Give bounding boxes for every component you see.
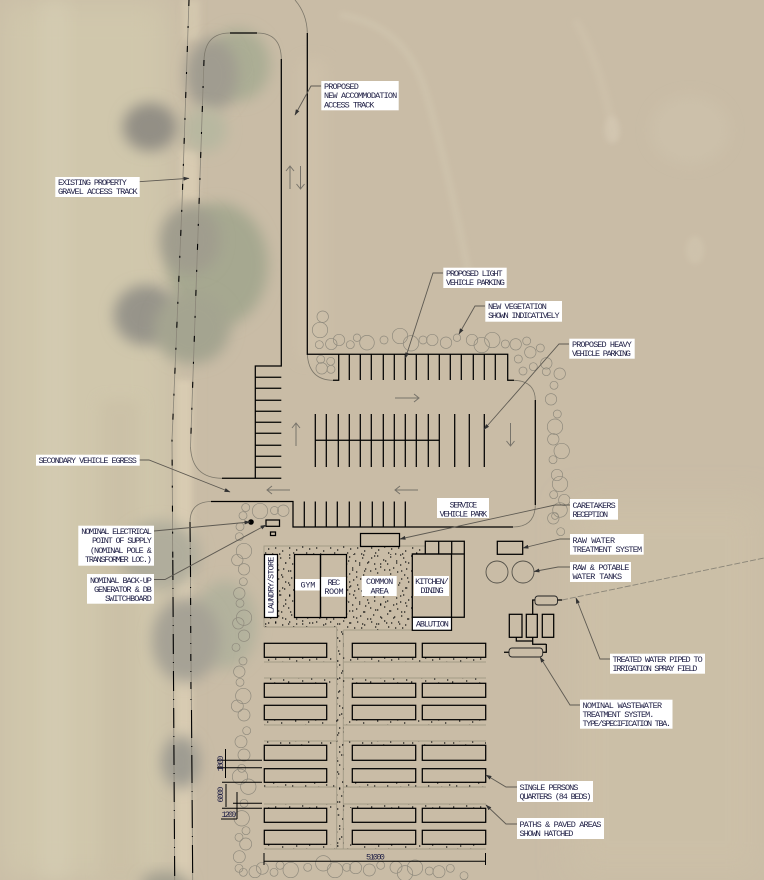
leader: raw water treatment bbox=[523, 539, 570, 548]
label: heavy vehicle parking: VEHICLE PARKING bbox=[572, 349, 631, 359]
label: caretakers reception: CARETAKERS bbox=[572, 501, 616, 511]
label: caretakers reception: RECEPTION bbox=[572, 510, 608, 520]
leader: treated water pipe bbox=[576, 598, 610, 659]
indicative new vegetation circles bbox=[231, 311, 570, 880]
label: new accommodation access track: ACCESS TRACK bbox=[324, 100, 375, 110]
label: paths and paved areas: PATHS & PAVED AREAS bbox=[520, 820, 601, 830]
label: nominal electrical point of supply: NOMINAL ELECTRICAL bbox=[81, 527, 152, 537]
gym building bbox=[294, 554, 320, 618]
label: new vegetation bbox=[485, 301, 562, 322]
leader: new vegetation bbox=[459, 306, 485, 334]
label: heavy vehicle parking bbox=[569, 339, 635, 359]
central facilities buildings bbox=[264, 534, 464, 630]
label: single persons quarters bbox=[517, 781, 593, 802]
label: single persons quarters: SINGLE PERSONS bbox=[520, 783, 578, 793]
label: single persons quarters: QUARTERS (84 BEDS) bbox=[520, 792, 590, 802]
label: treated water piped: IRRIGATION SPRAY FIELD bbox=[612, 664, 697, 674]
label: raw and potable water tanks: WATER TANKS bbox=[572, 572, 622, 582]
label: back-up generator: NOMINAL BACK-UP bbox=[90, 576, 152, 586]
label: new vegetation: SHOWN INDICATIVELY bbox=[488, 311, 559, 321]
label: paths and paved areas bbox=[517, 818, 604, 839]
label: raw water treatment system: TREATMENT SYSTEM bbox=[572, 545, 642, 555]
leader: new access track bbox=[295, 86, 321, 115]
label: new accommodation access track: PROPOSED bbox=[324, 82, 359, 92]
label: raw and potable water tanks: RAW & POTABLE bbox=[572, 563, 629, 573]
label: light vehicle parking: PROPOSED LIGHT bbox=[446, 269, 502, 279]
dimension lines: 1800 bbox=[216, 756, 226, 772]
rec room building: REC bbox=[328, 578, 340, 588]
laundry store building: LAUNDRY/STORE bbox=[266, 557, 276, 614]
label: treated water piped: TREATED WATER PIPED TO bbox=[612, 655, 703, 665]
label: secondary vehicle egress: SECONDARY VEHICLE EGRESS bbox=[38, 456, 137, 466]
leader: heavy vehicle parking bbox=[484, 344, 569, 430]
label: existing gravel access track: GRAVEL ACCESS TRACK bbox=[58, 187, 138, 197]
label: existing gravel access track: EXISTING PROPERTY bbox=[58, 178, 127, 188]
electrical point of supply and generator bbox=[248, 519, 280, 536]
leader: electrical supply bbox=[154, 522, 250, 531]
rec room building: ROOM bbox=[324, 587, 343, 597]
label: paths and paved areas: SHOWN HATCHED bbox=[520, 829, 573, 839]
leader: gravel access track bbox=[130, 178, 189, 182]
label: caretakers reception bbox=[570, 499, 618, 520]
traffic direction arrows bbox=[267, 166, 514, 494]
label: existing gravel access track bbox=[55, 177, 140, 197]
common area label: AREA bbox=[371, 586, 390, 596]
dimension lines: 1200 bbox=[222, 810, 236, 820]
kitchen dining and ablution block: ABLUTION bbox=[416, 620, 449, 630]
label: nominal wastewater treatment system: TYPE/SPECIFICATION TBA. bbox=[582, 719, 670, 729]
laundry store building bbox=[264, 554, 278, 618]
kitchen dining and ablution block: KITCHEN/ bbox=[415, 577, 449, 587]
label: new vegetation: NEW VEGETATION bbox=[488, 302, 547, 312]
leader: paths and paved areas bbox=[486, 805, 517, 824]
label: treated water piped bbox=[610, 654, 705, 674]
label: light vehicle parking: VEHICLE PARKING bbox=[446, 278, 505, 288]
hatched paved areas bbox=[264, 546, 486, 849]
common area label: COMMON bbox=[366, 577, 393, 587]
gym building: GYM bbox=[300, 580, 315, 590]
leader: secondary egress bbox=[139, 460, 230, 492]
leader: light vehicle parking bbox=[406, 273, 443, 358]
label: raw and potable water tanks bbox=[570, 562, 631, 582]
dimension lines: 6000 bbox=[216, 787, 226, 802]
kitchen dining and ablution block: DINING bbox=[420, 586, 443, 596]
label: back-up generator: SWITCHBOARD bbox=[105, 594, 152, 604]
label: nominal electrical point of supply: TRANSFORMER LOC.) bbox=[85, 555, 151, 565]
service vehicle park bay bbox=[360, 534, 400, 546]
treated water irrigation pipe bbox=[562, 558, 764, 600]
label: heavy vehicle parking: PROPOSED HEAVY bbox=[572, 340, 632, 350]
label: raw water treatment system bbox=[570, 534, 644, 555]
proposed road and parking linework bbox=[190, 0, 535, 527]
leader: wastewater system bbox=[540, 657, 580, 705]
dimension lines bbox=[216, 749, 486, 865]
leader: water tanks bbox=[534, 567, 570, 572]
leader: caretakers reception bbox=[400, 505, 570, 539]
dimension lines: 51000 bbox=[366, 852, 385, 862]
label: new accommodation access track bbox=[321, 81, 399, 110]
label: nominal wastewater treatment system: NOMINAL WASTEWATER bbox=[582, 701, 662, 711]
label: service vehicle park bbox=[437, 498, 489, 519]
label: nominal electrical point of supply: POINT OF SUPPLY bbox=[92, 536, 152, 546]
label: back-up generator bbox=[87, 574, 154, 604]
label: nominal electrical point of supply: (NOMINAL POLE & bbox=[90, 546, 152, 556]
label: nominal wastewater treatment system bbox=[580, 700, 672, 729]
water tanks and treatment bbox=[486, 541, 534, 583]
label: back-up generator: GENERATOR & DB bbox=[94, 585, 152, 595]
label: service vehicle park: VEHICLE PARK bbox=[440, 509, 488, 519]
label: service vehicle park: SERVICE bbox=[450, 500, 477, 510]
label: nominal wastewater treatment system: TREATMENT SYSTEM. bbox=[582, 710, 654, 720]
label: raw water treatment system: RAW WATER bbox=[572, 536, 615, 546]
label: new accommodation access track: NEW ACCOMMODATION bbox=[324, 91, 397, 101]
wastewater treatment system bbox=[504, 596, 562, 657]
kitchen dining and ablution block bbox=[412, 541, 464, 630]
single persons quarters blocks bbox=[264, 643, 486, 844]
label: nominal electrical point of supply bbox=[78, 526, 154, 566]
leader: backup generator bbox=[154, 525, 266, 580]
existing gravel access track boundaries bbox=[172, 0, 204, 880]
common area label bbox=[362, 576, 397, 596]
rec room building bbox=[320, 554, 346, 618]
label: light vehicle parking bbox=[443, 268, 507, 288]
leader: single persons quarters bbox=[486, 775, 517, 787]
